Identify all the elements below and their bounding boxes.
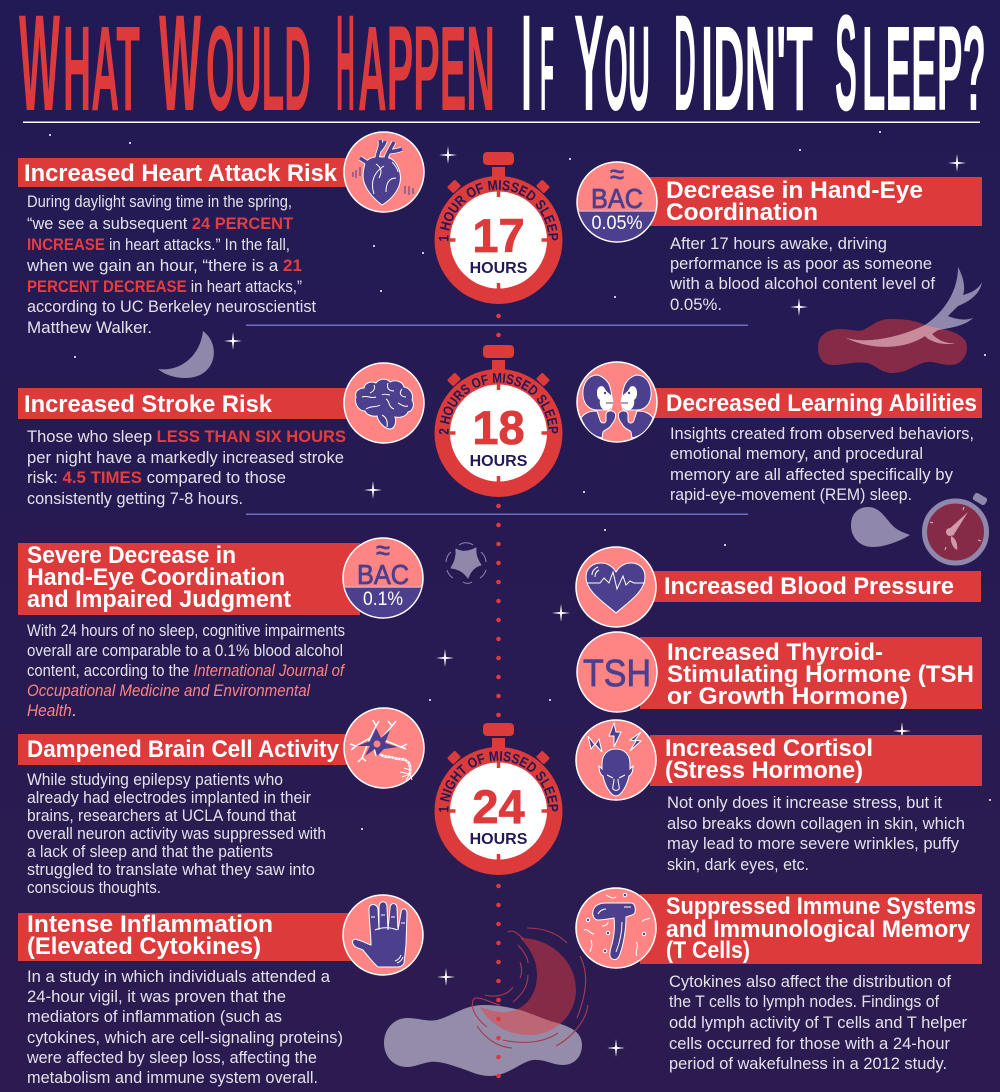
panel: thyroid-stimulating hormone: Stimulating Hormone (TSH (667, 661, 974, 688)
panel: inflammation: mediators of inflammation (such as (27, 1008, 282, 1026)
panel: cortisol: Not only does it increase stress, but it (667, 794, 942, 812)
clock: 18 hours: 18 (472, 401, 525, 454)
panel: heart attack risk: During daylight saving time in the spring, (27, 193, 292, 211)
dotted timeline (496, 314, 501, 1002)
panel: severe decrease in hand-eye coordination: overall are comparable to a 0.1% blood alcohol (27, 642, 343, 660)
icon: anatomical heart (344, 132, 424, 212)
panel: severe decrease in hand-eye coordination: Occupational Medicine and Environmental (27, 682, 311, 700)
panel: immune systems: Suppressed Immune Systems (666, 893, 976, 920)
icon: head with stress bolts (576, 720, 656, 800)
panel: brain cell activity: While studying epilepsy patients who (27, 771, 283, 789)
panel: cortisol (650, 735, 982, 874)
icon: heart with pulse (576, 547, 656, 627)
panel: heart attack risk: when we gain an hour, “there is a 21 (26, 257, 302, 275)
icon: BAC 0.05%: ≈ (610, 159, 624, 189)
panel: blood pressure: Increased Blood Pressure (664, 573, 954, 600)
panel: cortisol: (Stress Hormone) (665, 757, 863, 784)
panel: severe decrease in hand-eye coordination: content, according to the International Journal of (27, 662, 346, 680)
panel: learning abilities (640, 388, 982, 504)
clock: 17 hours (434, 152, 562, 304)
panel: immune systems: and Immunological Memory (666, 916, 971, 943)
panel: heart attack risk (18, 158, 358, 337)
icon: BAC 0.1%: ≈ (376, 535, 390, 565)
panel: immune systems: the T cells to lymph nodes. Findings of (669, 993, 939, 1011)
title: OU (604, 0, 650, 136)
panel: heart attack risk: PERCENT DECREASE in heart attacks,” (27, 278, 302, 296)
panel: severe decrease in hand-eye coordination: and Impaired Judgment (27, 586, 291, 613)
panel: brain cell activity (18, 734, 358, 897)
panel: learning abilities: Decreased Learning Abilities (666, 390, 977, 417)
clock: 24 hours: HOURS (470, 831, 528, 848)
panel: inflammation: cytokines, which are cell-signaling proteins) (27, 1029, 343, 1047)
title: APPEN (358, 0, 495, 136)
panel: severe decrease in hand-eye coordination: Health. (27, 702, 76, 720)
clock: 17 hours: 1 HOUR OF MISSED SLEEP (438, 180, 558, 241)
panel: hand-eye coordination (640, 177, 982, 314)
panel: heart attack risk: Matthew Walker. (27, 319, 152, 337)
panel: severe decrease in hand-eye coordination (18, 542, 360, 720)
panel: cortisol: also breaks down collagen in skin, which (667, 815, 965, 833)
clock: 24 hours (434, 723, 562, 875)
icon: hand (343, 895, 423, 975)
panel: heart attack risk: INCREASE in heart attacks.” In the fall, (27, 236, 290, 254)
panel: brain cell activity: Dampened Brain Cell Activity (27, 736, 340, 763)
clock: 24 hours: 24 (472, 780, 525, 833)
dots over bottom cloud (496, 1017, 501, 1078)
panel: severe decrease in hand-eye coordination: Severe Decrease in (27, 542, 236, 569)
title (19, 0, 986, 140)
panel: heart attack risk: according to UC Berkeley neuroscientist (27, 298, 316, 316)
panel: hand-eye coordination: performance is as poor as someone (670, 255, 932, 273)
panel: severe decrease in hand-eye coordination: Hand-Eye Coordination (27, 564, 285, 591)
icon: BAC 0.1%: BAC (357, 559, 409, 590)
panel: learning abilities: Insights created from observed behaviors, (670, 425, 974, 443)
panel: immune systems: period of wakefulness in a 2012 study. (669, 1055, 947, 1073)
panel: cortisol: skin, dark eyes, etc. (667, 856, 809, 874)
icon: BAC 0.1% (343, 535, 423, 618)
background stars (49, 131, 991, 1057)
panel: hand-eye coordination: 0.05%. (670, 296, 722, 314)
icon: TSH: TSH (583, 653, 651, 695)
icon: two facing monkeys (577, 362, 657, 442)
panel: immune systems: Cytokines also affect the distribution of (669, 973, 951, 991)
panel: stroke risk: risk: 4.5 TIMES compared to those (27, 469, 286, 487)
clock: 18 hours (434, 345, 562, 497)
panel: thyroid-stimulating hormone: or Growth Hormone) (667, 683, 908, 710)
panel: stroke risk: consistently getting 7-8 hours. (27, 490, 243, 508)
decoration: red cloud and antler branch (818, 267, 982, 373)
icon: BAC 0.1%: 0.1% (363, 589, 403, 610)
decoration: teardrop and stopwatch (851, 492, 988, 563)
panel: inflammation: 24-hour vigil, it was proven that the (27, 988, 286, 1006)
panel: inflammation: were affected by sleep loss, affecting the (26, 1049, 317, 1067)
decoration: small lavender star (446, 543, 486, 583)
panel: inflammation: In a study in which individuals attended a (27, 968, 331, 986)
panel: stroke risk: per night have a markedly increased stroke (27, 449, 344, 467)
decoration: bottom moon and cloud (384, 928, 588, 1076)
title: HAT (63, 0, 140, 136)
panel: stroke risk: Increased Stroke Risk (24, 391, 273, 418)
panel: cortisol: Increased Cortisol (665, 735, 873, 762)
clock: 24 hours: 1 NIGHT OF MISSED SLEEP (438, 751, 558, 812)
clock: 18 hours: 2 HOURS OF MISSED SLEEP (438, 373, 558, 434)
panel: learning abilities: emotional memory, and procedural (670, 445, 923, 463)
panel: hand-eye coordination: with a blood alcohol content level of (669, 275, 935, 293)
icon: BAC 0.05%: BAC (591, 183, 643, 214)
icon: TSH (577, 632, 657, 712)
icon: T cell (576, 888, 656, 968)
panel: brain cell activity: overall neuron activity was suppressed with (27, 825, 326, 843)
panel: brain cell activity: struggled to translate what they saw into (27, 861, 315, 879)
panel: brain cell activity: brains, researchers at UCLA found that (27, 807, 296, 825)
panel: heart attack risk: Increased Heart Attack Risk (24, 160, 338, 187)
panel: severe decrease in hand-eye coordination: With 24 hours of no sleep, cognitive impairments (27, 622, 345, 640)
panel: immune systems (640, 893, 982, 1073)
panel: cortisol: may lead to more severe wrinkles, puffy (667, 835, 960, 853)
panel: heart attack risk: “we see a subsequent 24 PERCENT (27, 215, 293, 233)
clock: 18 hours: HOURS (470, 453, 528, 470)
panel: hand-eye coordination: After 17 hours awake, driving (670, 235, 887, 253)
panel: brain cell activity: conscious thoughts. (27, 879, 161, 897)
icon: neuron (344, 708, 424, 788)
panel: stroke risk: Those who sleep LESS THAN SIX HOURS (27, 428, 346, 446)
icon: BAC 0.05% (577, 159, 657, 242)
panel: stroke risk (18, 388, 358, 508)
decoration: left crescent moon (158, 331, 214, 378)
panel: thyroid-stimulating hormone (640, 637, 982, 710)
panel: hand-eye coordination: Decrease in Hand-Eye (666, 177, 923, 204)
panel: brain cell activity: already had electrodes implanted in their (27, 789, 311, 807)
icon: brain (344, 363, 424, 443)
panel: brain cell activity: a lack of sleep and that the patients (27, 843, 273, 861)
title: F (540, 0, 554, 136)
panel: thyroid-stimulating hormone: Increased Thyroid- (667, 639, 883, 666)
icon: BAC 0.05%: 0.05% (592, 213, 643, 234)
panel: inflammation: metabolism and immune system overall. (27, 1069, 318, 1087)
panel: immune systems: (T Cells) (666, 937, 750, 964)
title: OULD (206, 0, 311, 136)
panel: immune systems: odd lymph activity of T cells and T helper (669, 1014, 967, 1032)
panel: inflammation: Intense Inflammation (27, 911, 273, 938)
panel: learning abilities: rapid-eye-movement (REM) sleep. (670, 486, 912, 504)
panel: hand-eye coordination: Coordination (666, 199, 818, 226)
panel: inflammation: (Elevated Cytokines) (27, 933, 261, 960)
clock: 17 hours: HOURS (470, 260, 528, 277)
clock: 17 hours: 17 (472, 209, 525, 262)
panel: immune systems: cells occurred for those with a 24-hour (669, 1035, 951, 1053)
panel: learning abilities: memory are all affected specifically by (670, 466, 954, 484)
panel: inflammation (18, 911, 358, 1087)
